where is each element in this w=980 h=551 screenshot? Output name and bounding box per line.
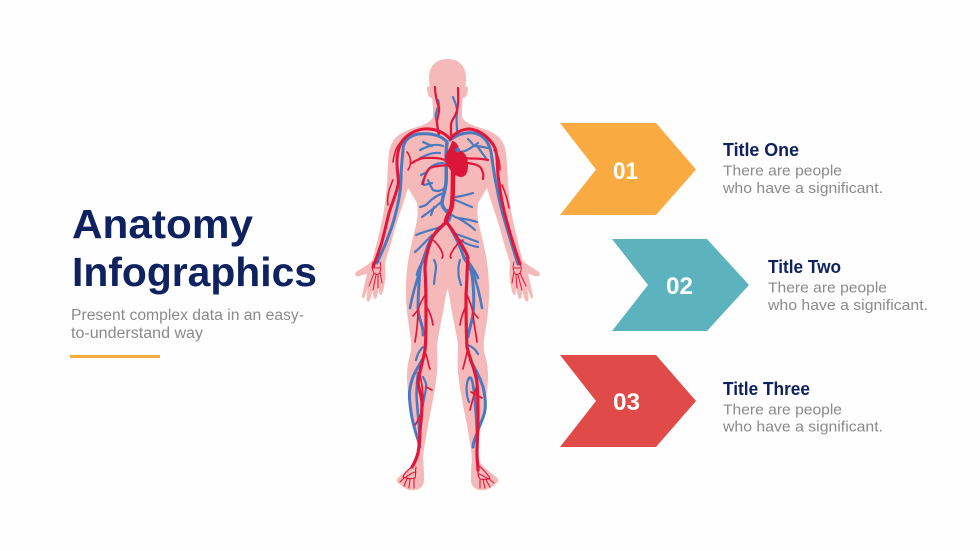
title: Infographics <box>72 249 317 295</box>
body silhouette <box>355 59 540 490</box>
text block: title three <box>722 379 883 436</box>
text block: title one <box>722 140 883 197</box>
text block: title two <box>767 257 928 314</box>
subtitle text <box>71 307 304 342</box>
text block: title three: There are people <box>723 402 842 418</box>
anatomy figure <box>355 59 540 490</box>
subtitle text: to-understand way <box>71 325 203 342</box>
subtitle text: Present complex data in an easy- <box>71 307 304 324</box>
title <box>72 201 317 295</box>
blue veins <box>377 97 518 447</box>
text block: title three: Title Three <box>723 379 810 399</box>
text block: title one: who have a significant. <box>722 180 883 197</box>
accent underline <box>70 355 160 358</box>
text block: title one: There are people <box>723 162 842 180</box>
arrow 03: 03 <box>613 389 640 416</box>
arrow 01 <box>560 123 696 215</box>
arrow 02: 02 <box>666 273 693 300</box>
heart <box>445 141 468 177</box>
text block: title two: who have a significant. <box>767 297 928 314</box>
foot vessels <box>400 466 494 488</box>
title: Anatomy <box>72 201 253 247</box>
arrow 02 <box>612 239 749 331</box>
text block: title two: Title Two <box>768 257 841 277</box>
text block: title one: Title One <box>723 140 799 160</box>
text block: title two: There are people <box>768 280 887 296</box>
red arteries <box>373 87 520 470</box>
hand vessels <box>369 262 526 290</box>
text block: title three: who have a significant. <box>722 418 883 436</box>
arrow 01: 01 <box>613 158 638 185</box>
arrow 03 <box>560 355 696 447</box>
